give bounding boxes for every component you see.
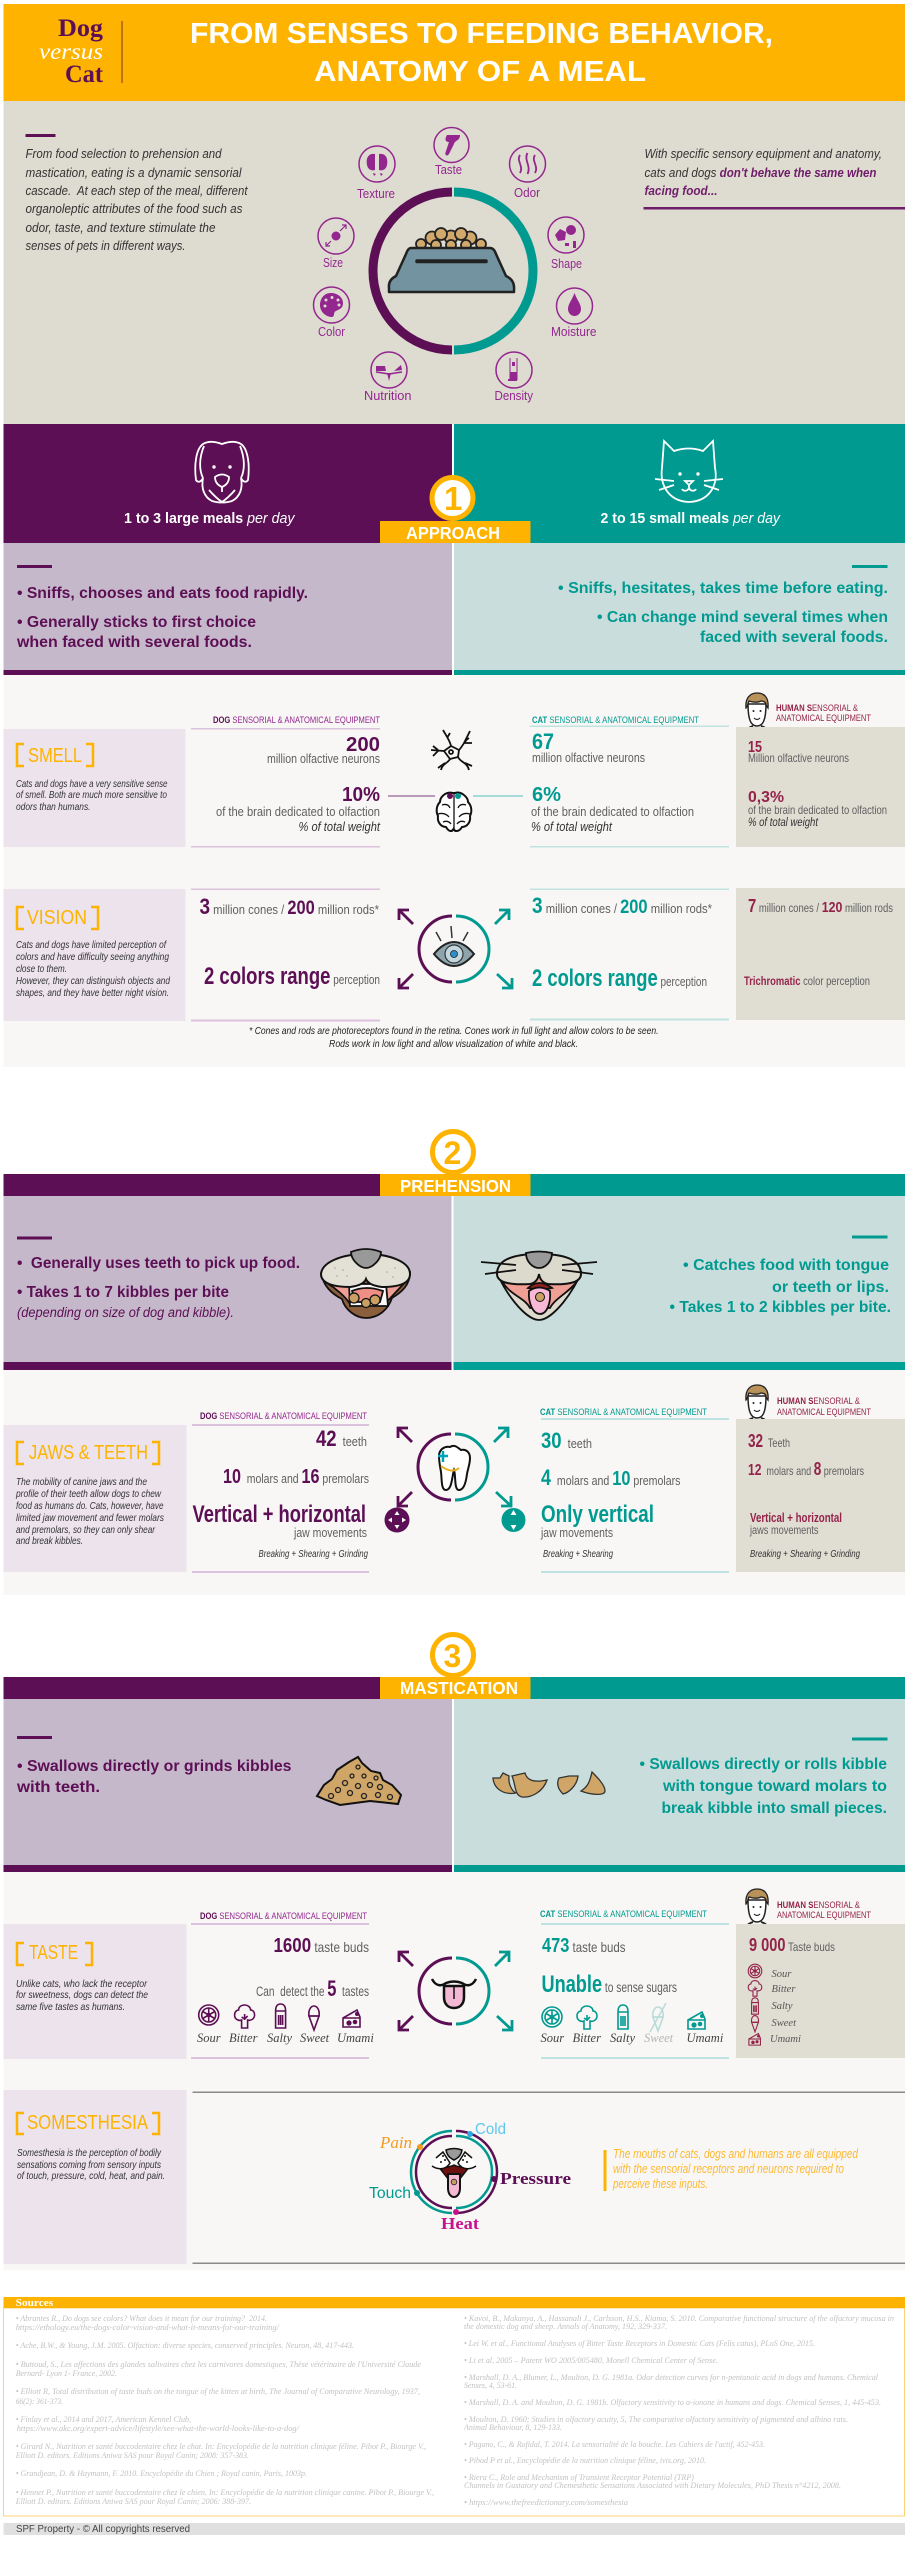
title	[190, 18, 773, 88]
dog jaws data: Vertical + horizontal	[192, 1501, 366, 1528]
icon: shape	[548, 217, 584, 271]
panel: smell: of smell. Both are much more sensitive to	[16, 789, 167, 801]
footnote: * Cones and rods are photoreceptors found in the retina. Cones work in full light and allow colors to be seen.	[249, 1025, 658, 1037]
icon: nutrition	[364, 352, 412, 403]
panel: dog prehension: (depending on size of dog and kibble).	[17, 1305, 234, 1320]
panel: cat prehension: • Catches food with tongue	[683, 1257, 889, 1274]
meals per day: dog: 1 to 3 large meals per day	[124, 510, 296, 527]
human smell data: 15	[748, 739, 762, 756]
panel: introduction	[4, 101, 905, 424]
panel: jaws and teeth: food as humans do. Cats, however, have	[16, 1500, 164, 1512]
sources right column: • Kavoi, B., Makanya, A., Hassanali J., Carlsson, H.S., Kiama, S. 2010. Comparative functional structure of the olfactory mucosa in	[464, 2313, 894, 2323]
human equipment heading: ANATOMICAL EQUIPMENT	[777, 1407, 871, 1418]
icon: density	[494, 352, 534, 403]
panel: dog approach behavior: when faced with several foods.	[16, 634, 252, 651]
heading: somesthesia: SOMESTHESIA	[27, 2112, 149, 2134]
sources left column: https://www.akc.org/expert-advice/lifestyle/see-what-the-world-looks-like-to-a-dog/	[17, 2423, 301, 2433]
panel: approach bars	[4, 424, 905, 543]
panel: somesthesia: of touch, pressure, cold, heat, and pain.	[17, 2170, 165, 2182]
sources left column: Bernard- Lyon 1- France, 2002.	[16, 2368, 117, 2378]
panel: somesthesia	[4, 2090, 186, 2264]
sensation labels: Pressure	[500, 2169, 572, 2188]
cat jaws data: jaw movements	[540, 1525, 613, 1540]
intro text right: cats and dogs don't behave the same when	[644, 165, 877, 180]
panel: mastication bar: MASTICATION	[400, 1678, 518, 1698]
intro text: mastication, eating is a dynamic sensorial	[26, 165, 243, 180]
human taste data: Umami	[770, 2034, 801, 2045]
sources right column: • Lei W. et al., Functional Analyses of Bitter Taste Receptors in Domestic Cats (Felis catus), PLoS One, 2015.	[464, 2338, 815, 2348]
icon: size: Size	[323, 256, 343, 270]
cat jaws data: CAT SENSORIAL & ANATOMICAL EQUIPMENT	[540, 1407, 707, 1418]
intro text: From food selection to prehension and	[26, 146, 222, 161]
dog jaws data: 42 teeth	[316, 1426, 367, 1451]
sources right column	[463, 2313, 894, 2507]
human smell data: Million olfactive neurons	[748, 751, 849, 765]
copyright bar: SPF Property - © All copyrights reserved	[16, 2524, 190, 2535]
sources left column: Elliott D. editors. Editions Aniwa SAS pour Royal Canin; 2008: 357-383.	[15, 2450, 249, 2460]
intro text: odor, taste, and texture stimulate the	[26, 220, 216, 235]
panel: taste: same five tastes as humans.	[16, 2001, 125, 2013]
sources left column: • Finlay et al., 2014 and 2017, American Kennel Club,	[16, 2414, 191, 2424]
sources left column: Elliott D. editors. Editions Aniwa SAS pour Royal Canin; 2006: 388-397.	[15, 2496, 251, 2506]
cat jaws data: 4 molars and 10 premolars	[541, 1465, 681, 1490]
dog taste data: 1600 taste buds	[274, 1935, 369, 1957]
panel: somesthesia: sensations coming from sensory inputs	[17, 2159, 162, 2171]
connector lines	[388, 795, 523, 797]
panel: vision: Cats and dogs have limited perception of	[16, 939, 167, 951]
icon: shape: Shape	[551, 257, 582, 271]
icon: taste	[434, 128, 469, 177]
sources left column: • Grandjean, D. & Haymann, F. 2010. Encyclopédie du Chien ; Royal canin, Paris, 1003p.	[16, 2468, 307, 2478]
brand: dog versus cat	[39, 15, 122, 88]
panel: dog mastication: with teeth.	[16, 1779, 100, 1796]
icon: dog mouth	[321, 1249, 410, 1318]
cat taste labels: Sour	[540, 2031, 564, 2045]
icon: color: Color	[318, 325, 345, 339]
panel: cat approach behavior: • Sniffs, hesitates, takes time before eating.	[558, 580, 888, 597]
human jaws data	[736, 1419, 905, 1572]
dog smell data: million olfactive neurons	[267, 751, 380, 766]
icon: dog face	[195, 442, 249, 502]
cat smell data	[530, 715, 729, 848]
cat smell data: 6%	[532, 784, 561, 806]
icon: moisture	[551, 288, 597, 339]
icon: density: Density	[494, 389, 534, 403]
sources right column: • Moulton, D. 1960; Studies in olfactory acuity, 5, The comparative olfactory sensitivity of pigmented and albino rats.	[464, 2414, 848, 2424]
cat taste icons	[542, 2003, 705, 2032]
human taste data: Salty	[772, 2001, 793, 2012]
human equipment heading: ANATOMICAL EQUIPMENT	[776, 713, 871, 724]
icon: dog jaw movement	[384, 1508, 410, 1532]
human vision data: Trichromatic color perception	[744, 974, 870, 988]
panel: cat prehension: or teeth or lips.	[772, 1279, 889, 1296]
panel: mastication bar	[4, 1634, 905, 1699]
intro text: organoleptic attributes of the food such as	[26, 201, 243, 216]
icon: human	[745, 693, 769, 733]
dog taste data: Can detect the 5 tastes	[256, 1976, 369, 2001]
panel: cat approach behavior: faced with several foods.	[700, 629, 888, 646]
step badge 1: approach: 1	[444, 480, 462, 517]
intro text	[26, 134, 249, 253]
dog taste icons	[199, 2004, 360, 2030]
sources left column: • Buttoud, S., Les affections des glandes salivaires chez les carnivores domestiques, Thèse vétérinaire de l'Université Claude	[16, 2359, 421, 2369]
panel: smell: Cats and dogs have a very sensitive sense	[16, 778, 168, 790]
sources right column: • Riera C., Role and Mechanism of Transient Receptor Potential (TRP)	[464, 2472, 694, 2482]
panel: vision: shapes, and they have better night vision.	[16, 987, 169, 999]
panel: prehension bar: 2	[444, 1135, 461, 1171]
dog jaws data: jaw movements	[293, 1525, 367, 1540]
icon: cat mouth	[481, 1252, 597, 1320]
panel: somesthesia: Somesthesia is the perception of bodily	[17, 2147, 162, 2159]
dog vision data	[191, 888, 380, 1022]
page background	[4, 675, 905, 1067]
icon: cat jaw movement	[502, 1508, 526, 1532]
panel: prehension bar: PREHENSION	[400, 1176, 511, 1196]
panel: smell	[4, 729, 186, 847]
cat smell data: % of total weight	[531, 820, 612, 834]
panel: prehension bar	[4, 1132, 905, 1196]
human equipment heading	[776, 703, 871, 724]
human jaws data: 32 Teeth	[748, 1431, 790, 1451]
cat taste data: Unable to sense sugars	[542, 1971, 677, 1998]
background: jaws section	[4, 1370, 905, 1595]
dog taste labels: Sweet	[300, 2031, 330, 2045]
cat vision data	[530, 888, 729, 1020]
sources left column: 66(2): 361-373.	[16, 2396, 63, 2406]
dog smell data: DOG SENSORIAL & ANATOMICAL EQUIPMENT	[213, 715, 380, 726]
panel: taste: Unlike cats, who lack the receptor	[16, 1978, 147, 1990]
somesthesia diagram	[369, 2121, 572, 2233]
dog vision data: 3 million cones / 200 million rods*	[200, 894, 379, 919]
panel: vision: close to them.	[16, 963, 67, 975]
human vision data	[736, 888, 905, 1020]
panel: dog approach behavior: • Sniffs, chooses and eats food rapidly.	[17, 585, 308, 602]
sources left column: https://ethology.eu/the-dogs-color-vision-and-what-it-means-for-our-training/	[16, 2322, 281, 2332]
sources right column: Senses, 4, 53-61.	[464, 2380, 517, 2390]
step badge 1: approach	[380, 478, 530, 543]
footnote	[249, 1025, 658, 1050]
icon: taste: Taste	[435, 163, 462, 177]
copyright bar	[4, 2523, 905, 2535]
cat vision data: 3 million cones / 200 million rods*	[532, 893, 712, 918]
human equipment heading	[777, 1900, 871, 1921]
dog taste labels: Bitter	[229, 2031, 258, 2045]
panel: dog mastication: • Swallows directly or grinds kibbles	[17, 1758, 292, 1775]
human equipment heading: HUMAN SENSORIAL &	[777, 1396, 861, 1407]
sensation labels: Pain	[379, 2133, 412, 2152]
human jaws data: jaws movements	[749, 1523, 818, 1537]
human equipment heading: ANATOMICAL EQUIPMENT	[777, 1910, 871, 1921]
dog taste data	[191, 1911, 374, 2059]
cat taste labels: Sweet	[644, 2031, 674, 2045]
sources right column: • Pibod P et al., Encyclopédie de la nutrition clinique féline, ivis.org, 2010.	[464, 2455, 706, 2465]
panel: cat mastication: with tongue toward molars to	[662, 1778, 887, 1795]
human equipment heading: HUMAN SENSORIAL &	[776, 703, 859, 714]
human jaws data: Breaking + Shearing + Grinding	[750, 1549, 860, 1560]
sources right column: Channels in Gustatory and Chemesthetic Sensations Associated with Dietary Molecules, PhD Thesis n°4212, 2008.	[464, 2480, 841, 2490]
icon: texture	[357, 146, 395, 201]
icon: moisture: Moisture	[551, 325, 597, 339]
dog vision data: 2 colors range perception	[204, 963, 380, 990]
dog smell data: of the brain dedicated to olfaction	[216, 804, 380, 819]
intro text: cascade. At each step of the meal, different	[26, 183, 249, 198]
heading: vision: VISION	[27, 907, 87, 929]
icon: food bowl	[389, 228, 514, 292]
intro text right: With specific sensory equipment and anatomy,	[644, 146, 882, 161]
icon: odor	[510, 146, 546, 200]
dog jaws data	[192, 1411, 369, 1573]
icon: human	[745, 1889, 769, 1929]
human vision data: 7 million cones / 120 million rods	[748, 896, 893, 916]
panel: jaws and teeth: limited jaw movement and fewer molars	[16, 1512, 165, 1524]
panel: cat mastication	[454, 1699, 905, 1872]
human taste data	[736, 1924, 905, 2058]
sensation labels: Touch	[369, 2185, 411, 2202]
sources right column: • Li et al, 2005 – Patent WO 2005/005480, Monell Chemical Center of Sense.	[464, 2355, 718, 2365]
cat jaws data	[540, 1407, 729, 1573]
cat jaws data: Breaking + Shearing	[543, 1549, 613, 1560]
icon: kibble heap	[317, 1757, 401, 1805]
sources right column: • Marshall, D. A., Blumer, L., Moulton, D. G. 1981a. Odor detection curves for n-pentanoic acid in dogs and humans. Chemical	[464, 2372, 879, 2382]
sources right column: Animal Behaviour, 8, 129-133.	[463, 2422, 562, 2432]
panel: sources: Sources	[16, 2298, 53, 2309]
meals per day: cat: 2 to 15 small meals per day	[600, 510, 781, 527]
sources left column: • Ache, B.W., & Young, J.M. 2005. Olfaction: diverse species, conserved principles. Neuron, 48, 417-443.	[16, 2340, 354, 2350]
somesthesia diagram frame	[192, 2092, 905, 2264]
cat taste data	[540, 1909, 729, 2059]
sources right column: the domestic dog and sheep. Annals of Anatomy, 192, 329-337.	[464, 2321, 667, 2331]
sources right column: • Marshall, D. A. and Moulton, D. G. 1981b. Olfactory sensitivity to α-ionone in humans and dogs. Chemical Senses, 1, 445-453.	[464, 2397, 881, 2407]
cat smell data: of the brain dedicated to olfaction	[531, 804, 694, 819]
icon: tongue with ring and arrows	[399, 1952, 512, 2030]
human taste data: Sour	[772, 1969, 792, 1980]
icon: odor: Odor	[514, 186, 540, 200]
human smell data: % of total weight	[748, 817, 819, 829]
human jaws data: 12 molars and 8 premolars	[748, 1459, 864, 1479]
icon: size	[318, 218, 354, 270]
callout: mouth receptors: perceive these inputs.	[612, 2176, 708, 2191]
icon: eye with ring and arrows	[399, 910, 512, 988]
sources right column: • Pagano, C., & Rofidal, T. 2014. La sensorialité de la bouche. Les Cahiers de l'actif, 452-453.	[464, 2439, 765, 2449]
cat vision data: 2 colors range perception	[532, 965, 707, 992]
panel: sources	[4, 2297, 905, 2516]
dog taste data: DOG SENSORIAL & ANATOMICAL EQUIPMENT	[200, 1911, 367, 1922]
cat taste labels: Umami	[686, 2031, 724, 2045]
intro text: senses of pets in different ways.	[26, 238, 186, 253]
sources left column	[15, 2313, 434, 2506]
panel: vision: colors and have difficulty seeing anything	[16, 951, 169, 963]
sensation labels	[369, 2121, 572, 2233]
dog smell data	[191, 715, 380, 848]
panel: cat mastication: • Swallows directly or rolls kibble	[640, 1756, 887, 1773]
panel: dog mastication	[4, 1699, 452, 1872]
cat taste labels	[540, 2031, 724, 2045]
panel: cat approach behavior: • Can change mind several times when	[597, 609, 888, 626]
dog taste labels: Salty	[267, 2031, 292, 2045]
panel: jaws and teeth: The mobility of canine jaws and the	[16, 1476, 147, 1488]
panel: taste	[4, 1924, 186, 2059]
dog smell data: 200	[346, 734, 380, 756]
human taste data: Sweet	[772, 2018, 797, 2029]
panel: mastication bar: 3	[444, 1638, 461, 1674]
sources left column: • Girard N., Nutrition et santé buccodentaire chez le chat. In: Encyclopédie de la nutrition clinique féline. Pibot P., Biourge V.,	[16, 2441, 426, 2451]
sources right column: • https://www.thefreedictionary.com/somesthesia	[464, 2497, 628, 2507]
cat smell data: million olfactive neurons	[532, 750, 645, 765]
panel: dog prehension: • Generally uses teeth to pick up food.	[17, 1255, 300, 1272]
icon: nutrition: Nutrition	[364, 389, 412, 403]
panel: dog approach behavior: • Generally sticks to first choice	[17, 614, 256, 631]
human equipment heading: HUMAN SENSORIAL &	[777, 1900, 861, 1911]
sources left column: • Hennet P., Nutrition et santé buccodentaire chez le chien. In: Encyclopédie de la nutrition clinique canine. Pibot P., Biourge V.,	[16, 2487, 434, 2497]
footnote: Rods work in low light and allow visualization of white and black.	[329, 1038, 578, 1050]
icon: kibble pieces	[493, 1772, 605, 1797]
cat jaws data: Only vertical	[541, 1501, 654, 1528]
human taste data: Bitter	[772, 1984, 796, 1995]
icon: tooth with ring and arrows	[398, 1428, 511, 1506]
title: FROM SENSES TO FEEDING BEHAVIOR,	[190, 18, 773, 50]
panel: vision: However, they can distinguish objects and	[16, 975, 171, 987]
cat taste data: 473 taste buds	[542, 1935, 626, 1957]
background: taste section	[4, 1872, 905, 2270]
human smell data	[736, 727, 905, 847]
brand: dog versus cat: Cat	[65, 61, 104, 88]
panel: dog prehension: • Takes 1 to 7 kibbles per bite	[17, 1284, 229, 1301]
panel: cat mastication: break kibble into small pieces.	[662, 1800, 887, 1817]
ring with bowl	[373, 192, 533, 350]
cat smell data: 67	[532, 729, 554, 754]
panel: header	[4, 4, 905, 101]
intro text right: facing food...	[644, 183, 718, 198]
panel: cat approach behavior	[454, 543, 905, 675]
panel: taste: for sweetness, dogs can detect the	[16, 1989, 148, 2001]
dog taste labels: Umami	[337, 2031, 374, 2045]
panel: vision	[4, 889, 186, 1021]
cat jaws data: 30 teeth	[541, 1428, 592, 1453]
human taste data: 9 000 Taste buds	[749, 1935, 835, 1955]
panel: smell: odors than humans.	[16, 801, 90, 813]
sensation labels: Heat	[441, 2214, 479, 2233]
dog taste labels	[197, 2031, 374, 2045]
panel: jaws and teeth	[4, 1425, 186, 1572]
dog smell data: % of total weight	[298, 820, 380, 834]
icon: muzzle with tongue	[432, 2148, 476, 2197]
sources left column: • Abrantes R., Do dogs see colors? What does it mean for our training? 2014.	[16, 2313, 267, 2323]
intro text right	[644, 146, 905, 210]
cat taste labels: Bitter	[572, 2031, 601, 2045]
callout: mouth receptors: with the sensorial receptors and neurons required to	[613, 2161, 844, 2176]
panel: jaws and teeth: profile of their teeth allow dogs to chew	[15, 1488, 162, 1500]
icon: color	[314, 287, 350, 339]
cat smell data: CAT SENSORIAL & ANATOMICAL EQUIPMENT	[532, 715, 699, 726]
sensation dots	[414, 2131, 497, 2215]
panel: dog prehension	[4, 1196, 452, 1370]
dog jaws data: Breaking + Shearing + Grinding	[258, 1549, 368, 1560]
brand: dog versus cat: versus	[39, 39, 103, 64]
heading: jaws and teeth: JAWS & TEETH	[29, 1442, 148, 1464]
icon: human	[745, 1385, 769, 1425]
panel: dog approach behavior	[4, 543, 452, 675]
sources left column: • Elliott R, Total distribution of taste buds on the tongue of the kitten at birth, The Journal of Comparative Neurology, 1937,	[16, 2386, 420, 2396]
step badge 1: approach: APPROACH	[406, 523, 500, 543]
panel: cat prehension	[454, 1196, 905, 1370]
human smell data: 0,3%	[748, 789, 784, 806]
icon: brain	[437, 793, 471, 831]
sensation labels: Cold	[475, 2121, 506, 2138]
dog jaws data: DOG SENSORIAL & ANATOMICAL EQUIPMENT	[200, 1411, 367, 1422]
cat taste labels: Salty	[610, 2031, 635, 2045]
icon: cat face	[655, 441, 723, 502]
panel: cat prehension: • Takes 1 to 2 kibbles per bite.	[670, 1299, 891, 1316]
sensation rings	[411, 2131, 497, 2213]
panel: jaws and teeth: and premolars, so they can only shear	[16, 1524, 155, 1536]
icon: neuron	[431, 730, 472, 770]
callout: mouth receptors	[604, 2146, 859, 2191]
dog taste labels: Sour	[197, 2031, 221, 2045]
panel: jaws and teeth: and break kibbles.	[16, 1535, 83, 1547]
cat taste data: CAT SENSORIAL & ANATOMICAL EQUIPMENT	[540, 1909, 707, 1920]
dog jaws data: 10 molars and 16 premolars	[223, 1466, 369, 1488]
title: ANATOMY OF A MEAL	[314, 56, 646, 88]
heading: smell: SMELL	[28, 745, 82, 767]
dog smell data: 10%	[342, 784, 380, 806]
human equipment heading	[777, 1396, 871, 1418]
heading: taste: TASTE	[29, 1942, 78, 1964]
icon: texture: Texture	[357, 187, 395, 201]
human jaws data: Vertical + horizontal	[750, 1510, 842, 1525]
brand: dog versus cat: Dog	[58, 15, 104, 42]
